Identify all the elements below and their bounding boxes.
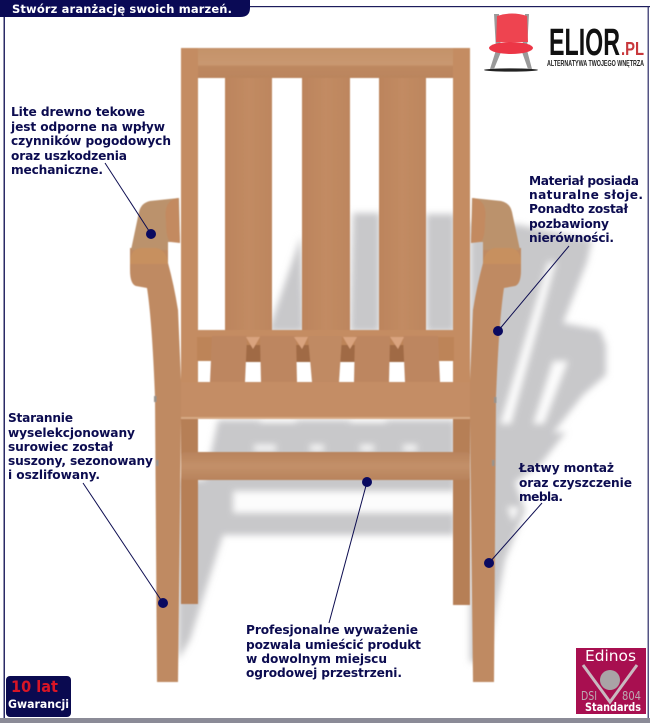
callout: solid teak: jest odporne na wpływ <box>10 120 165 134</box>
callout: easy assembly <box>484 461 632 568</box>
callout: selected material: surowiec został <box>8 440 113 454</box>
callout: selected material <box>8 411 168 608</box>
callout: selected material: suszony, sezonowany <box>8 454 153 468</box>
badge: Edinos DSI 804 Standards: Standards <box>585 700 641 714</box>
badge: Edinos DSI 804 Standards <box>576 647 646 714</box>
callout: natural grain: pozbawiony <box>529 217 609 231</box>
callout: balance: w dowolnym miejscu <box>246 652 387 666</box>
floor shadow of chair <box>178 213 606 662</box>
callout: solid teak: Lite drewno tekowe <box>11 105 145 119</box>
callout: solid teak <box>10 105 171 239</box>
callout: balance: pozwala umieścić produkt <box>246 638 421 652</box>
badge: 10 year warranty: Gwarancji <box>8 697 69 711</box>
callout: natural grain: Materiał posiada <box>529 174 639 188</box>
badge: Edinos DSI 804 Standards: 804 <box>622 688 641 703</box>
callout: natural grain <box>493 174 643 336</box>
left arm and front leg <box>130 198 181 682</box>
callout: solid teak: mechaniczne. <box>11 163 103 177</box>
callout: selected material: wyselekcjonowany <box>8 426 135 440</box>
header banner: Stwórz aranżację swoich marzeń. <box>12 2 232 16</box>
callout: easy assembly: Łatwy montaż <box>518 461 614 475</box>
callout: balance: Profesjonalne wyważenie <box>246 623 418 637</box>
callout: solid teak: oraz uszkodzenia <box>11 149 127 163</box>
teak chair <box>130 48 521 682</box>
right arm and front leg <box>470 198 521 682</box>
badge: Edinos DSI 804 Standards: Edinos <box>585 647 636 665</box>
callout: selected material: Starannie <box>8 411 73 425</box>
callout: selected material: i oszlifowany. <box>8 468 100 482</box>
badge: Edinos DSI 804 Standards: DSI <box>581 688 597 703</box>
back slats <box>225 78 426 332</box>
top rail <box>198 48 453 78</box>
lower rail <box>181 452 470 480</box>
callout: natural grain: naturalne słoje. <box>529 188 643 202</box>
callout: solid teak: czynników pogodowych <box>11 134 171 148</box>
seat <box>181 330 470 419</box>
bolts <box>154 396 496 466</box>
badge: 10 year warranty: 10 lat <box>11 677 58 696</box>
logo: Elior.pl <box>484 14 644 72</box>
callout: natural grain: nierówności. <box>529 231 614 245</box>
callout: natural grain: Ponadto został <box>529 202 628 216</box>
callout: balance <box>246 477 421 680</box>
logo: Elior.pl: .PL <box>621 39 644 59</box>
callout: balance: ogrodowej przestrzeni. <box>246 666 402 680</box>
badge: 10 year warranty <box>6 676 71 717</box>
back posts and rear legs <box>181 48 470 605</box>
icon: red chair <box>484 14 538 72</box>
callout: easy assembly: oraz czyszczenie <box>519 476 632 490</box>
callout: easy assembly: mebla. <box>519 490 563 504</box>
